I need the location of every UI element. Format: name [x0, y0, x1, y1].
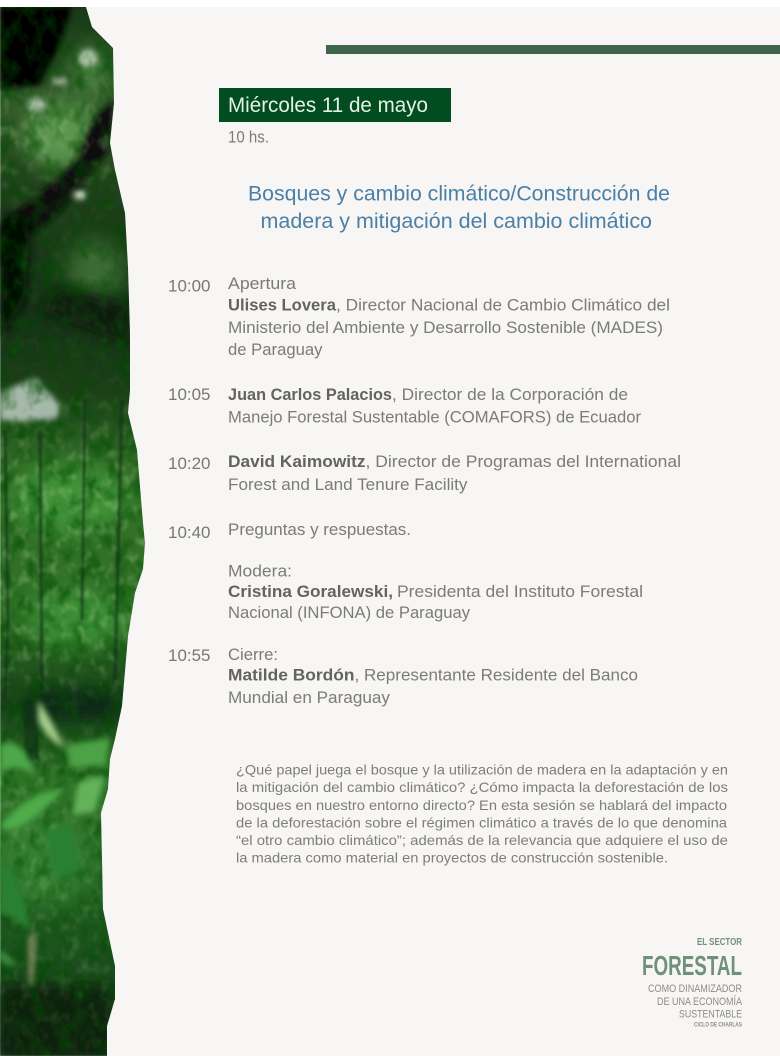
agenda item 10:00: 10:00: [168, 278, 210, 296]
top decorative bar: [326, 45, 780, 54]
moderator: Cristina Goralewski,: [228, 583, 393, 601]
agenda item 10:20: David Kaimowitz: [228, 453, 366, 471]
session description: de la deforestación sobre el régimen climático a través de lo que denomina: [236, 816, 727, 831]
series logo: DE UNA ECONOMÍA: [657, 995, 743, 1008]
agenda item 10:40: Preguntas y respuestas.: [228, 521, 411, 539]
session title: [248, 182, 670, 233]
agenda item 10:05: Juan Carlos Palacios: [228, 386, 392, 404]
series logo: [642, 937, 743, 1029]
agenda item 10:20: Forest and Land Tenure Facility: [228, 476, 468, 494]
agenda item 10:00: , Director Nacional de Cambio Climático del: [336, 296, 670, 314]
agenda item 10:00: Apertura: [228, 275, 297, 293]
date banner: Miércoles 11 de mayo: [228, 94, 428, 117]
agenda item 10:20: , Director de Programas del International: [366, 453, 681, 471]
agenda item 10:05: [168, 386, 642, 426]
agenda item 10:55: Mundial en Paraguay: [228, 689, 391, 707]
date banner: [219, 88, 451, 122]
foreground leaves: [0, 700, 110, 985]
agenda item 10:40: 10:40: [168, 524, 210, 542]
sky patches: [0, 50, 97, 422]
agenda item 10:55: , Representante Residente del Banco: [354, 666, 638, 684]
agenda item 10:05: , Director de la Corporación de: [392, 386, 628, 404]
dark tree branch: [0, 100, 114, 268]
moderator: Presidenta del Instituto Forestal: [397, 583, 643, 601]
noise texture dark: [0, 0, 150, 1056]
agenda item 10:00: Ulises Lovera: [228, 296, 337, 314]
series logo: COMO DINAMIZADOR: [648, 983, 742, 995]
session description: [236, 762, 728, 865]
agenda item 10:55: 10:55: [168, 647, 210, 665]
agenda item 10:55: [168, 646, 638, 707]
session title: madera y mitigación del cambio climático: [260, 209, 652, 233]
agenda item 10:00: de Paraguay: [228, 341, 323, 359]
session description: “el otro cambio climático”; además de la relevancia que adquiere el uso de: [236, 833, 728, 848]
start time: 10 hs.: [228, 128, 269, 146]
moderator: Nacional (INFONA) de Paraguay: [228, 604, 471, 622]
agenda item 10:00: [168, 275, 670, 359]
agenda item 10:40: [168, 521, 411, 542]
agenda item 10:05: 10:05: [168, 386, 210, 404]
moderator: Modera:: [228, 562, 292, 580]
session description: bosques en nuestro entorno directo? En esta sesión se hablará del impacto: [236, 798, 727, 813]
agenda item 10:00: Ministerio del Ambiente y Desarrollo Sostenible (MADES): [228, 319, 663, 337]
session description: ¿Qué papel juega el bosque y la utilización de madera en la adaptación y en: [236, 762, 728, 777]
vines: [5, 400, 122, 760]
agenda item 10:05: Manejo Forestal Sustentable (COMAFORS) de Ecuador: [228, 408, 642, 426]
agenda item 10:20: [168, 453, 681, 494]
agenda item 10:20: 10:20: [168, 455, 210, 473]
series logo: CICLO DE CHARLAS: [694, 1023, 742, 1029]
noise texture light: [0, 0, 150, 1056]
agenda item 10:55: Cierre:: [228, 646, 278, 664]
moderator: [228, 562, 643, 622]
forest photo strip: [0, 0, 150, 1056]
agenda item 10:55: Matilde Bordón: [228, 666, 354, 684]
session title: Bosques y cambio climático/Construcción de: [248, 182, 670, 206]
series logo: SUSTENTABLE: [679, 1009, 742, 1021]
session description: la mitigación del cambio climático? ¿Cómo impacta la deforestación de los: [236, 780, 728, 795]
series logo: EL SECTOR: [697, 937, 743, 948]
session description: la madera como material en proyectos de construcción sostenible.: [236, 850, 668, 865]
